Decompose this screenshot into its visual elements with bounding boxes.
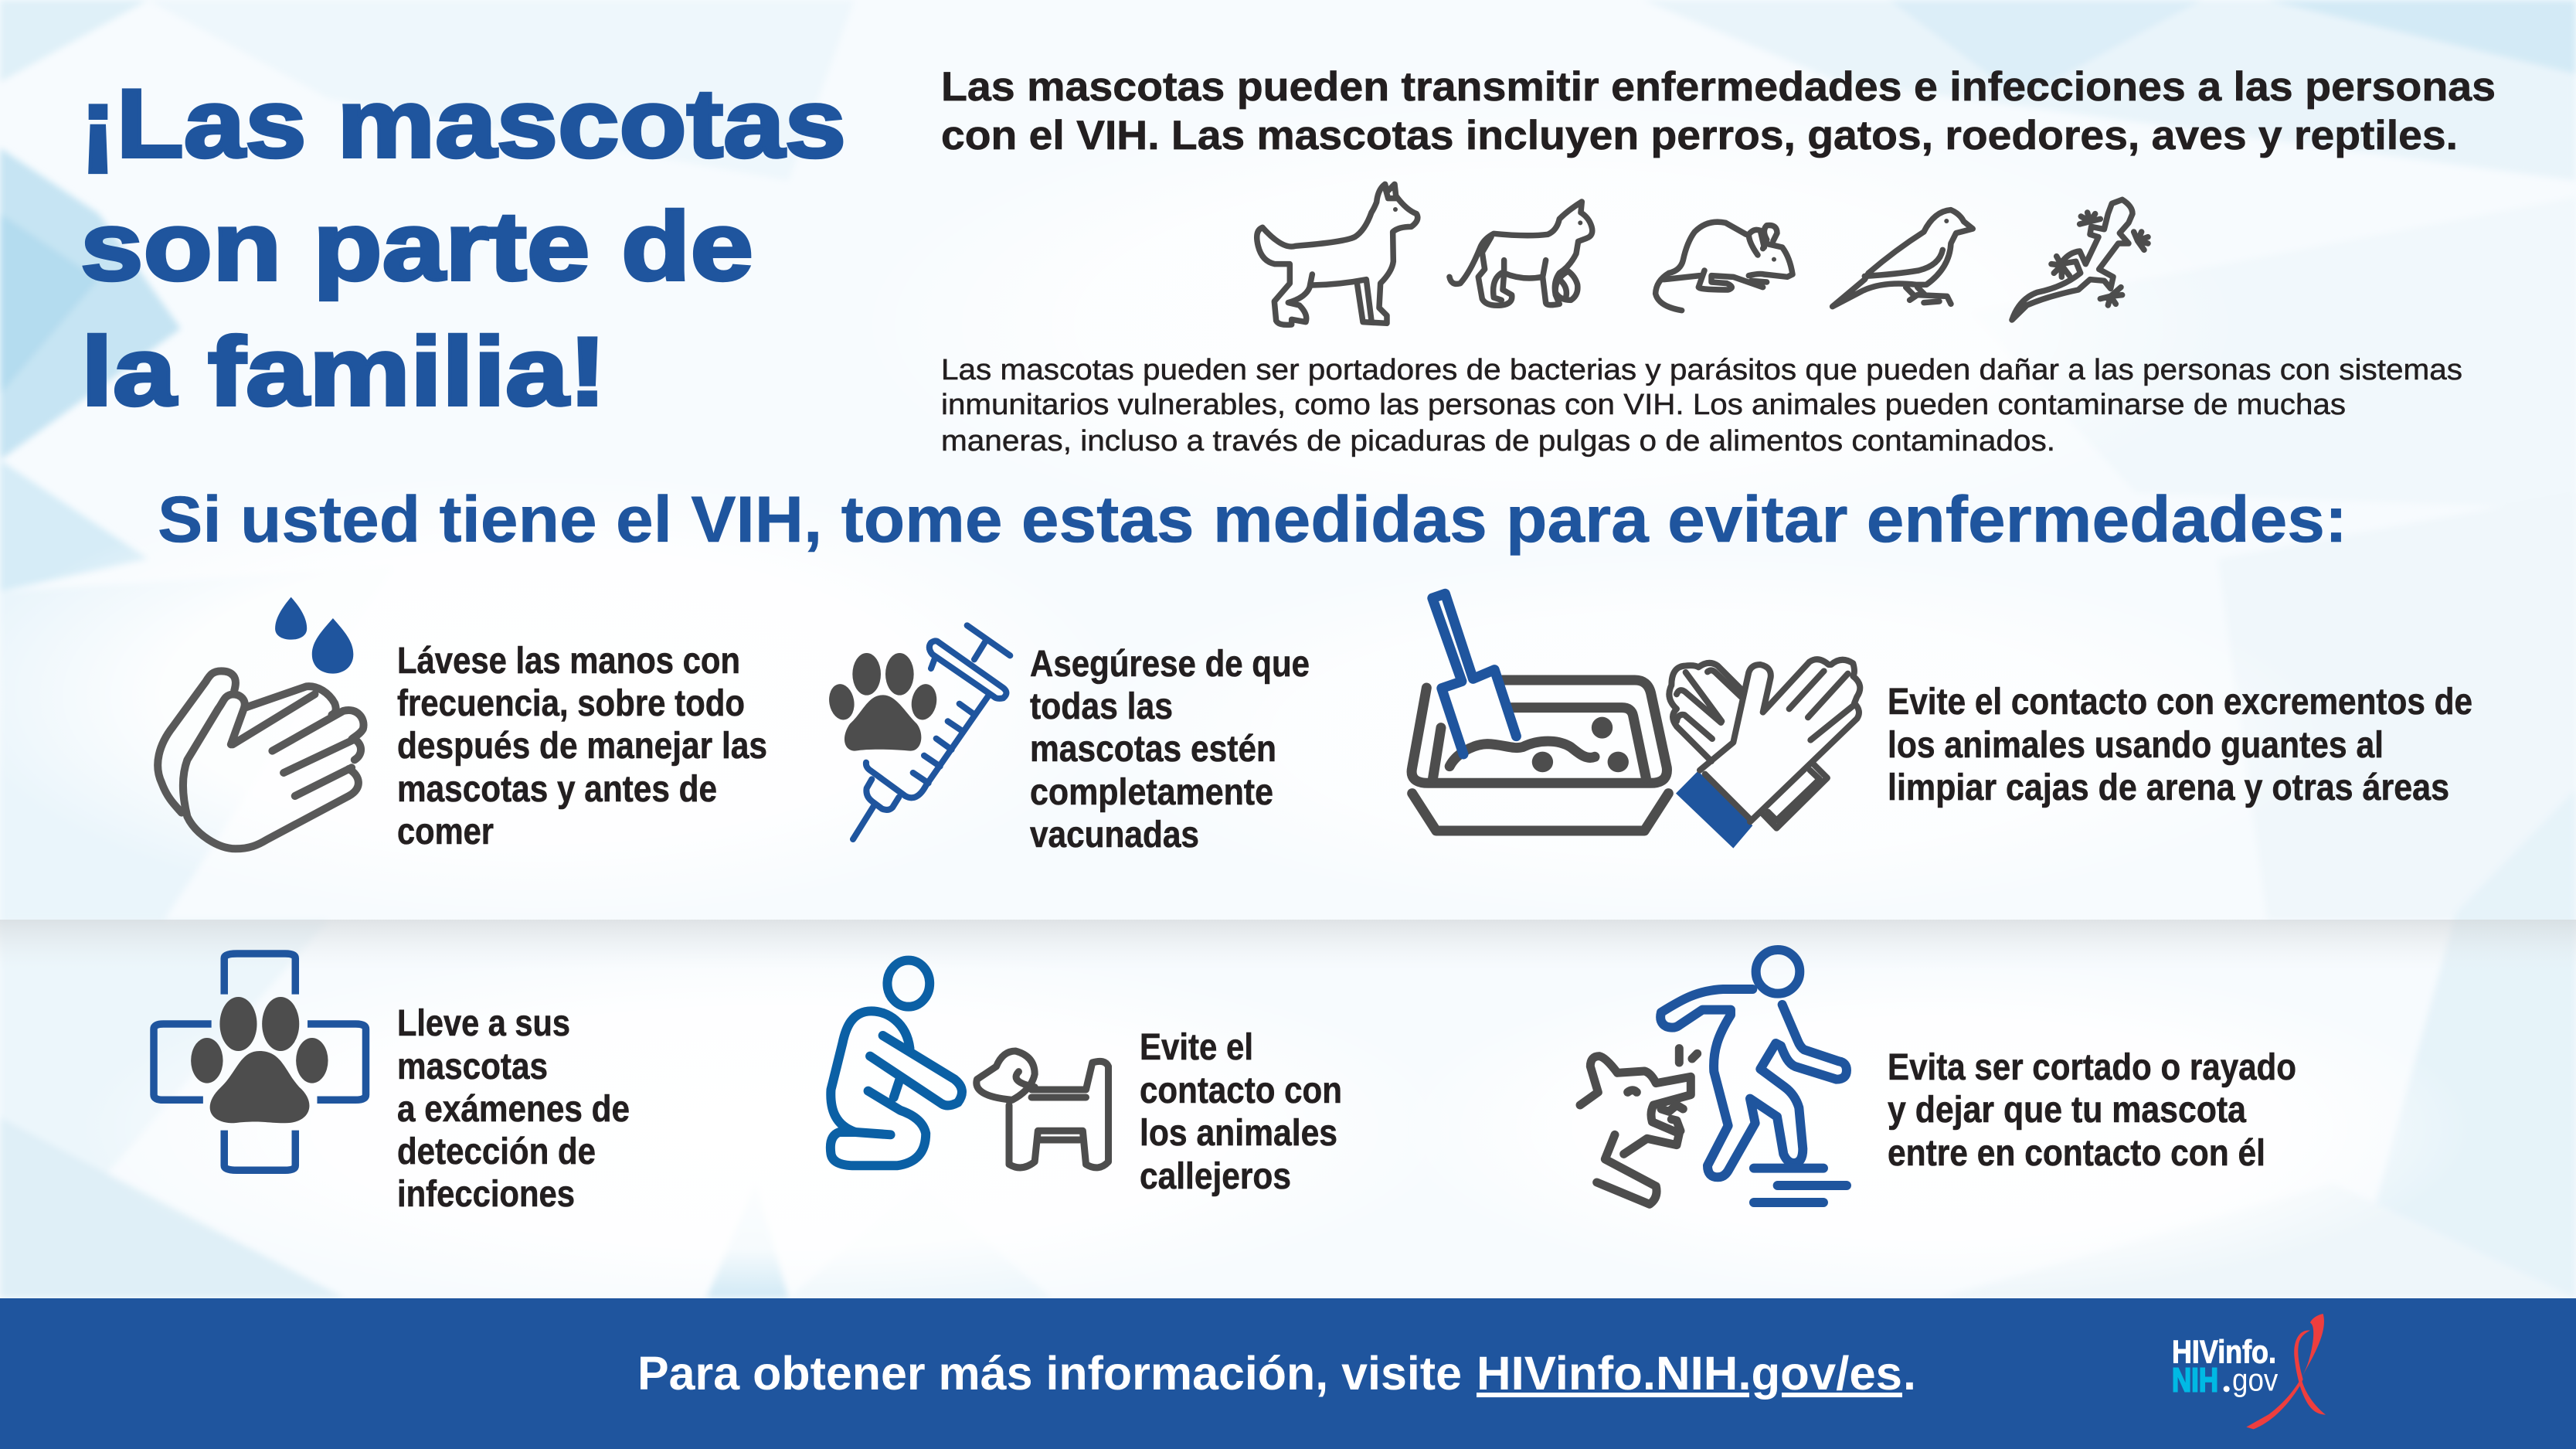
instruction text: contacto con: [1140, 1070, 1342, 1111]
step 3: litter box gloves: [1412, 594, 2472, 849]
footer call to action: Para obtener más información, visite: [637, 1347, 1462, 1400]
instruction text: [1888, 682, 2472, 808]
instruction text: Evita ser cortado o rayado: [1888, 1047, 2296, 1088]
instruction text: callejeros: [1140, 1156, 1291, 1197]
title: son parte de: [80, 192, 753, 301]
logo: HIVinfo.NIH.gov with red ribbon: NIH: [2172, 1362, 2218, 1400]
instruction text: Lleve a sus: [397, 1003, 570, 1044]
footer band: [0, 1298, 2576, 1449]
icon: medical cross with paw: [154, 954, 365, 1170]
instruction text: frecuencia, sobre todo: [397, 683, 745, 724]
logo: HIVinfo.NIH.gov with red ribbon: [2172, 1314, 2326, 1429]
instruction text: [1888, 1047, 2296, 1174]
icon: crouching person and dog: [831, 961, 1109, 1168]
supporting paragraph: maneras, incluso a través de picaduras de pulgas o de alimentos contaminados.: [941, 425, 2055, 457]
instruction text: mascotas estén: [1030, 729, 1276, 770]
icon: snarling dog and person stepping away: [1580, 950, 1847, 1204]
instruction text: comer: [397, 811, 494, 852]
icon: litter box and scoop: [1412, 594, 1668, 831]
icon: paw and syringe: [827, 625, 1010, 839]
intro statement: [941, 64, 2496, 158]
instruction text: infecciones: [397, 1174, 575, 1215]
step 4: vet check-ups: [154, 954, 630, 1215]
instruction text: después de manejar las: [397, 726, 767, 767]
supporting paragraph: Las mascotas pueden ser portadores de bacterias y parásitos que pueden dañar a las personas con sistemas: [941, 354, 2462, 386]
instruction text: [1140, 1027, 1342, 1197]
supporting paragraph: [941, 354, 2462, 457]
footer call to action: HIVinfo.NIH.gov/es: [1477, 1347, 1902, 1400]
footer call to action: .: [1903, 1347, 1916, 1400]
title: la familia!: [81, 317, 607, 426]
instruction text: [1030, 644, 1310, 855]
icon: cat: [1449, 202, 1592, 305]
instruction text: vacunadas: [1030, 815, 1199, 855]
instruction text: mascotas: [397, 1046, 548, 1087]
instruction text: detección de: [397, 1131, 596, 1172]
instruction text: y dejar que tu mascota: [1888, 1090, 2246, 1131]
icon: gloves: [1669, 659, 1860, 849]
icon: rodent: [1656, 222, 1793, 311]
instruction text: los animales: [1140, 1113, 1337, 1154]
icon: hands and water drops: [158, 597, 364, 849]
instruction text: Evite el contacto con excrementos de: [1888, 682, 2472, 723]
instruction text: mascotas y antes de: [397, 769, 717, 810]
instruction text: todas las: [1030, 686, 1173, 727]
section heading: Si usted tiene el VIH, tome estas medidas para evitar enfermedades:: [158, 483, 2347, 556]
intro statement: Las mascotas pueden transmitir enfermedades e infecciones a las personas: [941, 64, 2496, 110]
title: ¡Las mascotas: [80, 69, 846, 178]
supporting paragraph: inmunitarios vulnerables, como las personas con VIH. Los animales pueden contaminarse de muchas: [941, 389, 2346, 421]
step 6: avoid bites and scratches: [1580, 950, 2296, 1204]
instruction text: Lávese las manos con: [397, 641, 740, 682]
step 2: vaccinate pets: [827, 625, 1310, 855]
instruction text: [397, 1003, 630, 1215]
instruction text: [397, 641, 767, 852]
instruction text: Evite el: [1140, 1027, 1253, 1068]
step 1: wash hands: [158, 597, 767, 852]
step 5: avoid stray animals: [831, 961, 1342, 1197]
instruction text: los animales usando guantes al: [1888, 725, 2384, 766]
intro statement: con el VIH. Las mascotas incluyen perros, gatos, roedores, aves y reptiles.: [941, 113, 2458, 158]
logo: HIVinfo.NIH.gov with red ribbon: HIVinfo.: [2172, 1334, 2276, 1369]
footer call to action: [637, 1347, 1916, 1400]
animal icons row: [1257, 184, 2148, 325]
instruction text: completamente: [1030, 772, 1273, 813]
icon: lizard: [2012, 199, 2148, 320]
instruction text: Asegúrese de que: [1030, 644, 1310, 685]
instruction text: entre en contacto con él: [1888, 1133, 2265, 1174]
instruction text: a exámenes de: [397, 1089, 630, 1130]
title: [80, 69, 846, 426]
icon: bird: [1833, 210, 1973, 307]
icon: dog: [1257, 184, 1418, 325]
logo: HIVinfo.NIH.gov with red ribbon: gov: [2232, 1362, 2279, 1397]
instruction text: limpiar cajas de arena y otras áreas: [1888, 767, 2449, 808]
